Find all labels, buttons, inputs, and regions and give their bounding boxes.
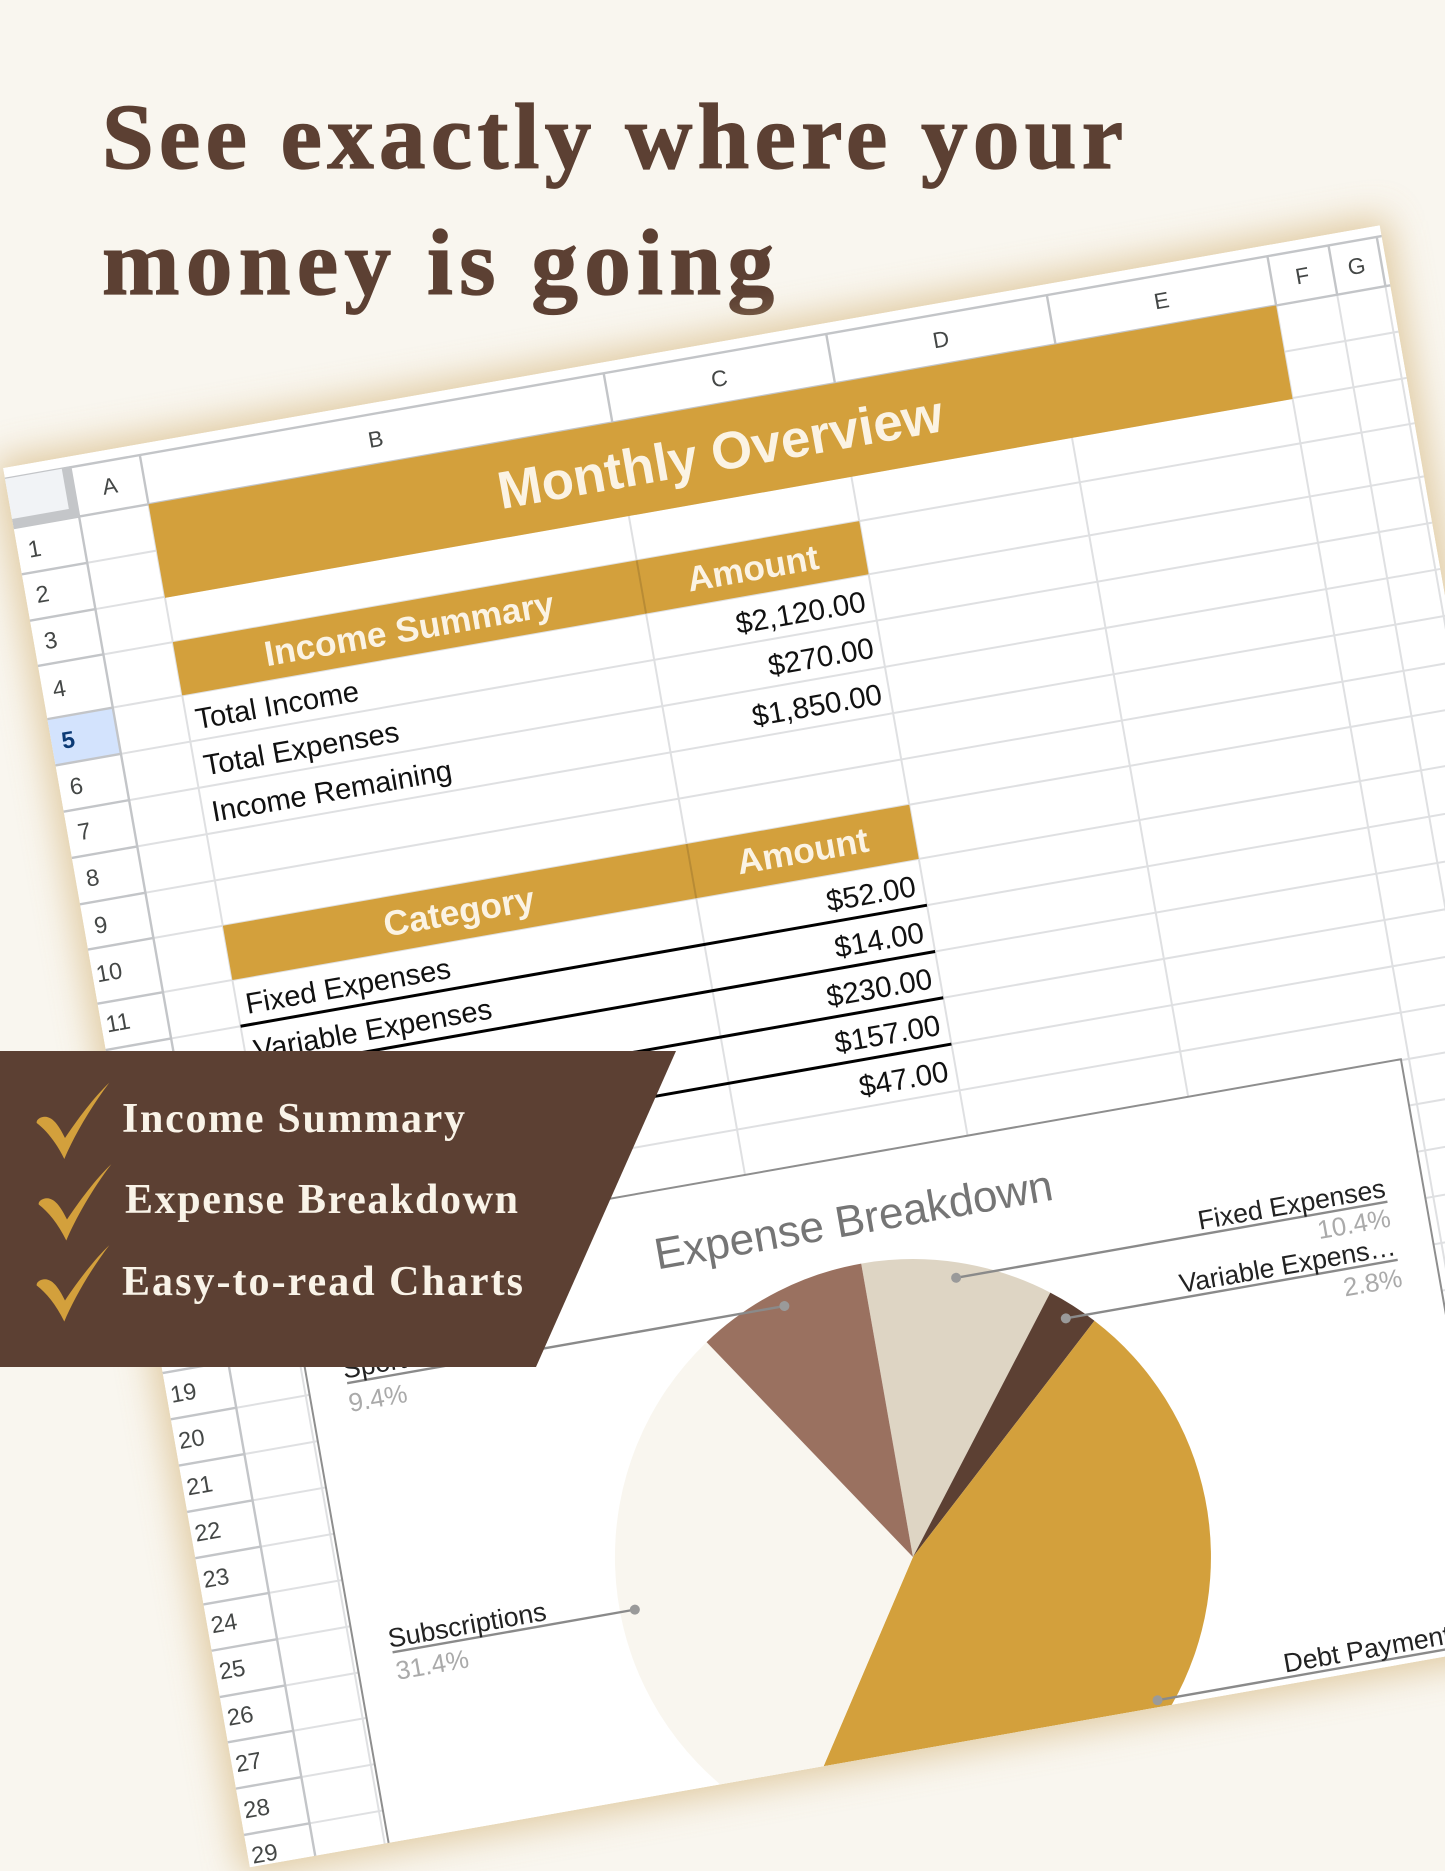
column letters: D <box>931 326 951 353</box>
chart title: Expense Breakdown <box>651 1161 1057 1279</box>
category table: $52.00 <box>824 870 918 918</box>
income summary table: Amount <box>684 538 822 600</box>
row numbers: 2 <box>34 580 51 608</box>
income summary table: $1,850.00 <box>750 678 885 733</box>
row numbers: 3 <box>42 626 59 654</box>
callout: Debt Payments <box>1152 1627 1445 1706</box>
column letters: C <box>709 365 730 392</box>
icon: check mark 3 <box>37 1245 109 1322</box>
row numbers: 9 <box>92 911 110 939</box>
column letters: B <box>366 426 385 453</box>
banner: Monthly Overview: Monthly Overview <box>493 384 948 521</box>
row numbers: 4 <box>50 675 68 703</box>
income summary table: Total Expenses <box>201 717 402 782</box>
category table: $14.00 <box>832 916 927 965</box>
callout: Fixed Expenses: Fixed Expenses <box>1195 1173 1388 1236</box>
category table: $157.00 <box>832 1009 943 1060</box>
column letters: F <box>1293 262 1311 289</box>
row numbers: 7 <box>76 817 93 845</box>
callout: Fixed Expenses: 10.4% <box>1315 1203 1393 1245</box>
icon: check mark 2 <box>39 1164 111 1240</box>
row numbers: 5 <box>59 726 77 754</box>
icon: check mark 1 <box>37 1083 109 1159</box>
category table: $47.00 <box>856 1055 951 1103</box>
highlighted row 5 header <box>47 708 121 765</box>
income summary table: Income Summary <box>261 585 557 674</box>
income summary table: $270.00 <box>766 632 876 683</box>
callout: Variable Expenses <box>1060 1246 1402 1324</box>
category table: Category <box>381 880 538 945</box>
row numbers: 29 <box>249 1839 280 1869</box>
row numbers: 22 <box>193 1517 223 1547</box>
chart panel: Expense Breakdown <box>285 1059 1445 1843</box>
callout: Sports <box>344 1301 790 1412</box>
title: See exactly where your <box>102 86 1123 189</box>
banner: Monthly Overview <box>149 305 1293 598</box>
callout: Subscriptions: 31.4% <box>393 1643 471 1686</box>
income summary table <box>173 521 892 830</box>
row numbers: 20 <box>176 1424 207 1454</box>
income summary table: Total Income <box>193 676 361 736</box>
row numbers: 8 <box>84 864 101 892</box>
income summary table: $2,120.00 <box>733 586 868 641</box>
column letters <box>100 253 1367 500</box>
callout: Subscriptions: Subscriptions <box>386 1596 549 1654</box>
pie chart <box>615 1259 1211 1784</box>
category table: $230.00 <box>824 963 935 1014</box>
row numbers: 26 <box>225 1701 255 1731</box>
column letters: G <box>1346 253 1367 280</box>
feature text 2: Expense Breakdown <box>125 1177 518 1223</box>
title: money is going <box>102 212 774 315</box>
row numbers: 6 <box>68 772 85 800</box>
feature banner <box>0 1051 676 1367</box>
column letters: A <box>100 473 119 500</box>
callout: Fixed Expenses <box>951 1184 1390 1283</box>
category table: Variable Expenses <box>251 994 494 1067</box>
row numbers: 10 <box>94 957 124 987</box>
feature text 1: Income Summary <box>122 1096 465 1142</box>
row numbers: 1 <box>26 535 43 563</box>
category table: Debt Payments <box>259 1047 462 1113</box>
feature text 3: Easy-to-read Charts <box>122 1259 523 1305</box>
row numbers: 27 <box>233 1747 264 1777</box>
row numbers: 24 <box>209 1608 239 1638</box>
category table: Amount <box>734 821 872 882</box>
callout: Subscriptions <box>389 1604 640 1679</box>
row numbers: 25 <box>217 1654 247 1685</box>
income summary table: Income Remaining <box>209 755 455 829</box>
column letters: E <box>1152 287 1171 314</box>
callout: Sports: Sports & Leisur… <box>340 1319 551 1384</box>
row numbers: 19 <box>168 1378 198 1408</box>
callout: Sports: 9.4% <box>346 1378 410 1418</box>
title <box>102 86 1123 315</box>
row numbers: 11 <box>104 1008 132 1037</box>
category table <box>222 804 952 1098</box>
category table: Subscriptions <box>268 1098 446 1160</box>
corner select-all cell <box>5 467 74 524</box>
callout: Variable Expenses: 2.8% <box>1341 1263 1404 1302</box>
callout: Variable Expenses: Variable Expens… <box>1177 1231 1398 1299</box>
row numbers <box>19 534 280 1869</box>
category table: Fixed Expenses <box>243 953 453 1021</box>
row numbers: 21 <box>185 1470 215 1500</box>
row numbers: 23 <box>201 1563 231 1593</box>
row numbers: 28 <box>241 1793 272 1823</box>
